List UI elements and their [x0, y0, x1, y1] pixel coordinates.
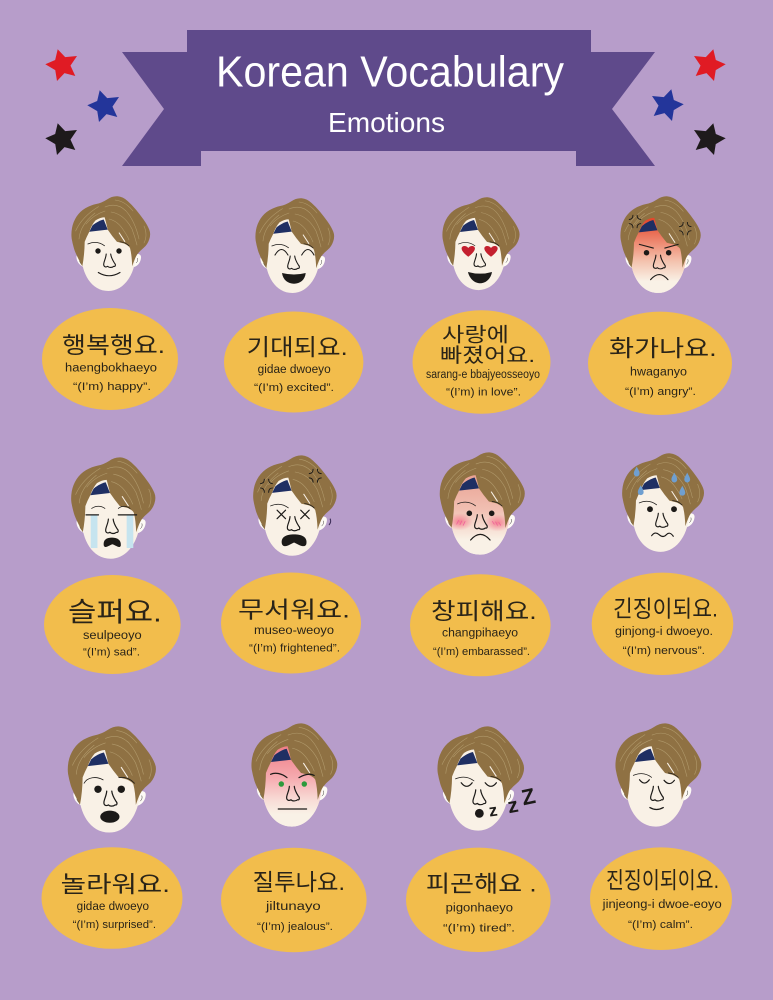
bubble: tired: 피곤해요 . [426, 870, 537, 896]
bubble: nervous: 긴징이되요. [613, 596, 718, 622]
card: calm [590, 723, 732, 950]
face: sad [71, 457, 155, 559]
bubble: excited: “(I’m) excited”. [254, 382, 334, 394]
right stars [652, 49, 726, 155]
bubble: calm [590, 847, 732, 950]
face: in love [442, 197, 520, 290]
bubble: surprised: gidae dwoeyo [77, 901, 149, 913]
face: nervous [622, 453, 704, 552]
card: tired [406, 726, 551, 952]
face: calm [615, 723, 701, 827]
bubble: excited [224, 312, 363, 412]
face: tired [437, 726, 524, 831]
bubble: tired: pigonhaeyo [446, 902, 513, 914]
bubble: happy [42, 308, 178, 410]
bubble: sad: 슬퍼요. [68, 598, 162, 628]
bubble: happy: 행복행요. [62, 332, 165, 358]
bubble: frightened: museo-weoyo [254, 625, 334, 637]
bubble: surprised: “(I’m) surprised”. [73, 919, 156, 931]
face: excited [255, 198, 334, 293]
bubble: calm: “(I’m) calm”. [628, 919, 693, 931]
bubble: frightened: “(I’m) frightened”. [249, 642, 340, 654]
icon: snoring z letters [488, 783, 538, 821]
card: excited [224, 198, 363, 412]
bubble: in love: “(I’m) in love”. [446, 386, 521, 398]
face: frightened [253, 455, 337, 556]
bubble: angry [588, 312, 732, 415]
bubble: surprised: 놀라워요. [61, 871, 170, 897]
bubble: embarrassed: 창피해요. [431, 598, 537, 624]
card: angry [588, 196, 732, 415]
bubble: calm: jinjeong-i dwoe-eoyo [602, 899, 722, 911]
bubble: tired [406, 848, 551, 952]
bubble: sad [44, 575, 181, 674]
card: nervous [592, 453, 733, 675]
bubble: angry: “(I’m) angry”. [625, 386, 696, 398]
bubble: jealous: 질투나요. [253, 869, 345, 895]
left stars [45, 49, 119, 155]
card: sad [44, 457, 181, 674]
card: surprised [42, 726, 182, 949]
title banner [122, 30, 655, 166]
icon: snoring z letters: Z [519, 783, 538, 810]
title: Korean Vocabulary [216, 48, 564, 96]
bubble: angry: hwaganyo [630, 366, 687, 378]
face: surprised [68, 726, 156, 833]
bubble: nervous [592, 573, 733, 675]
bubble: embarrassed [410, 574, 551, 676]
bubble: embarrassed: “(I’m) embarassed”. [433, 646, 530, 658]
bubble: frightened: 무서워요. [238, 596, 350, 622]
face: happy [71, 196, 150, 291]
face: jealous [251, 723, 337, 827]
face: embarrassed [440, 452, 525, 555]
card: jealous [221, 723, 367, 952]
bubble: in love: 사랑에 [442, 324, 509, 346]
card: happy [42, 196, 178, 410]
face: angry [620, 196, 701, 293]
card: frightened [221, 455, 361, 674]
bubble: surprised [42, 847, 182, 949]
bubble: excited: gidae dwoeyo [258, 364, 331, 376]
subtitle: Emotions [328, 107, 445, 138]
ribbon [122, 30, 655, 166]
bubble: sad: seulpeoyo [83, 630, 142, 642]
bubble: embarrassed: changpihaeyo [442, 628, 518, 640]
bubble: jealous [221, 848, 367, 952]
bubble: excited: 기대되요. [247, 334, 348, 360]
icon: snoring z letters: z [506, 794, 520, 818]
card: in love [412, 197, 550, 414]
bubble: frightened [221, 572, 361, 674]
bubble: jealous: “(I’m) jealous”. [257, 921, 333, 933]
bubble: sad: “(I’m) sad”. [83, 646, 140, 658]
bubble: angry: 화가나요. [609, 335, 717, 361]
icon: snoring z letters: z [488, 801, 499, 821]
bubble: happy: haengbokhaeyo [65, 362, 157, 374]
bubble: tired: “(I’m) tired”. [443, 922, 515, 934]
bubble: in love: sarang-e bbajyeosseoyo [426, 369, 540, 381]
bubble: in love [412, 310, 550, 414]
bubble: happy: “(I’m) happy”. [73, 381, 151, 393]
bubble: nervous: ginjong-i dwoeyo. [615, 626, 713, 638]
bubble: jealous: jiltunayo [265, 901, 321, 913]
bubble: calm: 진징이되이요. [606, 867, 719, 893]
card: embarrassed [410, 452, 551, 676]
bubble: in love: 빠졌어요. [440, 344, 535, 367]
bubble: nervous: “(I’m) nervous”. [623, 645, 705, 657]
